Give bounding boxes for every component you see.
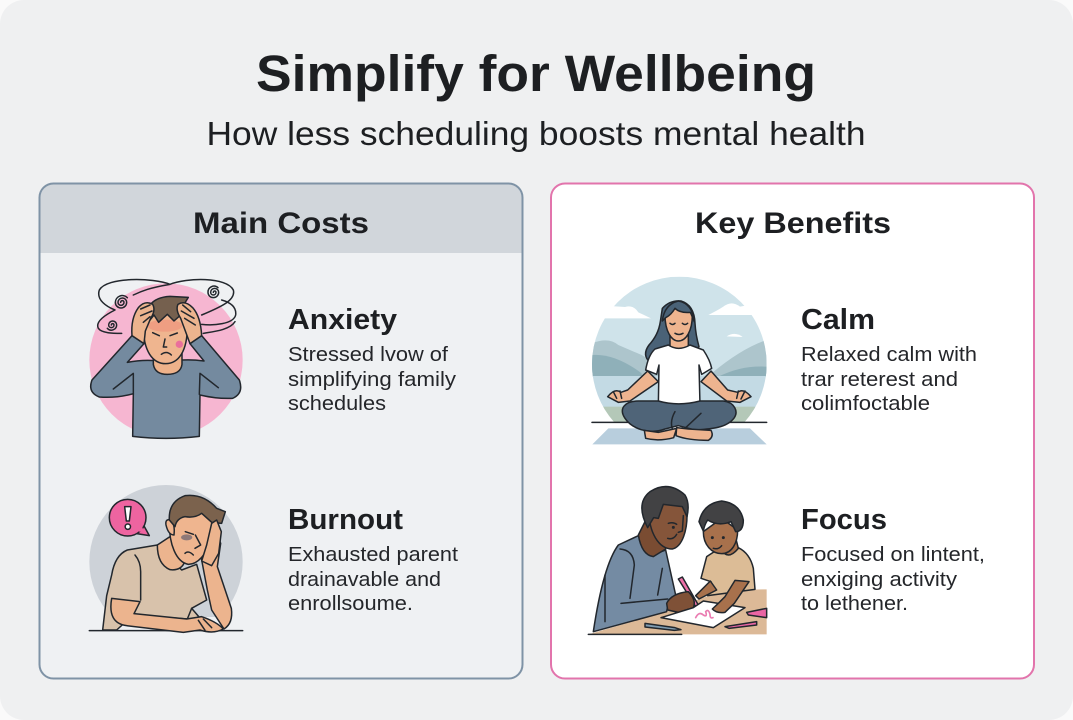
text: calm xyxy=(801,304,977,415)
arms xyxy=(608,371,658,402)
heading: key benefits: Key Benefits xyxy=(695,207,891,240)
arm front xyxy=(111,598,223,632)
pencils xyxy=(645,623,681,630)
neck xyxy=(670,333,688,350)
clouds xyxy=(595,305,651,318)
text: focus: Focus xyxy=(801,504,887,536)
feet xyxy=(644,428,677,440)
neck xyxy=(157,537,185,570)
arm up xyxy=(201,522,232,629)
title: Simplify for Wellbeing xyxy=(256,45,816,102)
panel: main costs xyxy=(40,184,522,678)
icon: anxiety person xyxy=(89,280,243,438)
face xyxy=(153,333,177,355)
marker xyxy=(678,577,700,611)
child xyxy=(696,501,755,599)
text: anxiety: schedules xyxy=(288,392,386,415)
text: focus xyxy=(801,504,985,615)
tee xyxy=(646,345,712,405)
text: anxiety xyxy=(288,304,457,415)
child forearm xyxy=(712,580,749,613)
panel header: main costs: Main Costs xyxy=(193,207,369,240)
text: burnout: Exhausted parent xyxy=(288,543,458,566)
hair xyxy=(646,301,699,365)
tee xyxy=(103,545,207,630)
hair xyxy=(169,495,225,527)
text: anxiety: Stressed lvow of xyxy=(288,343,448,366)
text: focus: enxiging activity xyxy=(801,568,958,591)
text: anxiety: simplifying family xyxy=(288,368,457,391)
text: focus: to lethener. xyxy=(801,592,908,615)
panel header: main costs xyxy=(40,184,522,253)
text: burnout xyxy=(288,504,458,615)
icon: burnout person xyxy=(89,485,243,632)
text: calm: Relaxed calm with xyxy=(801,343,977,366)
text: focus: Focused on lintent, xyxy=(801,543,985,566)
hands xyxy=(132,303,154,344)
hair xyxy=(150,296,189,322)
sweater xyxy=(91,336,241,438)
head xyxy=(143,312,187,364)
legs xyxy=(622,401,736,431)
text: burnout: Burnout xyxy=(288,504,403,536)
text: calm: Calm xyxy=(801,304,875,336)
text: anxiety: Anxiety xyxy=(288,304,397,336)
icon: parent and child drawing xyxy=(588,487,767,634)
parent xyxy=(593,487,688,632)
table xyxy=(588,589,767,634)
text: burnout: enrollsoume. xyxy=(288,592,413,615)
text: calm: trar reterest and xyxy=(801,368,958,391)
head xyxy=(169,508,214,564)
hand on head xyxy=(202,520,221,566)
yoga mat xyxy=(592,428,767,444)
paper xyxy=(661,601,745,628)
swirl lines xyxy=(98,280,236,333)
alert bubble xyxy=(109,499,149,536)
text: burnout: drainavable and xyxy=(288,568,441,591)
neck xyxy=(153,352,182,374)
icon: meditating woman xyxy=(592,277,767,444)
subtitle: How less scheduling boosts mental health xyxy=(206,115,866,152)
face xyxy=(665,309,692,341)
text: calm: colimfoctable xyxy=(801,392,930,415)
panel: key benefits xyxy=(551,184,1034,678)
